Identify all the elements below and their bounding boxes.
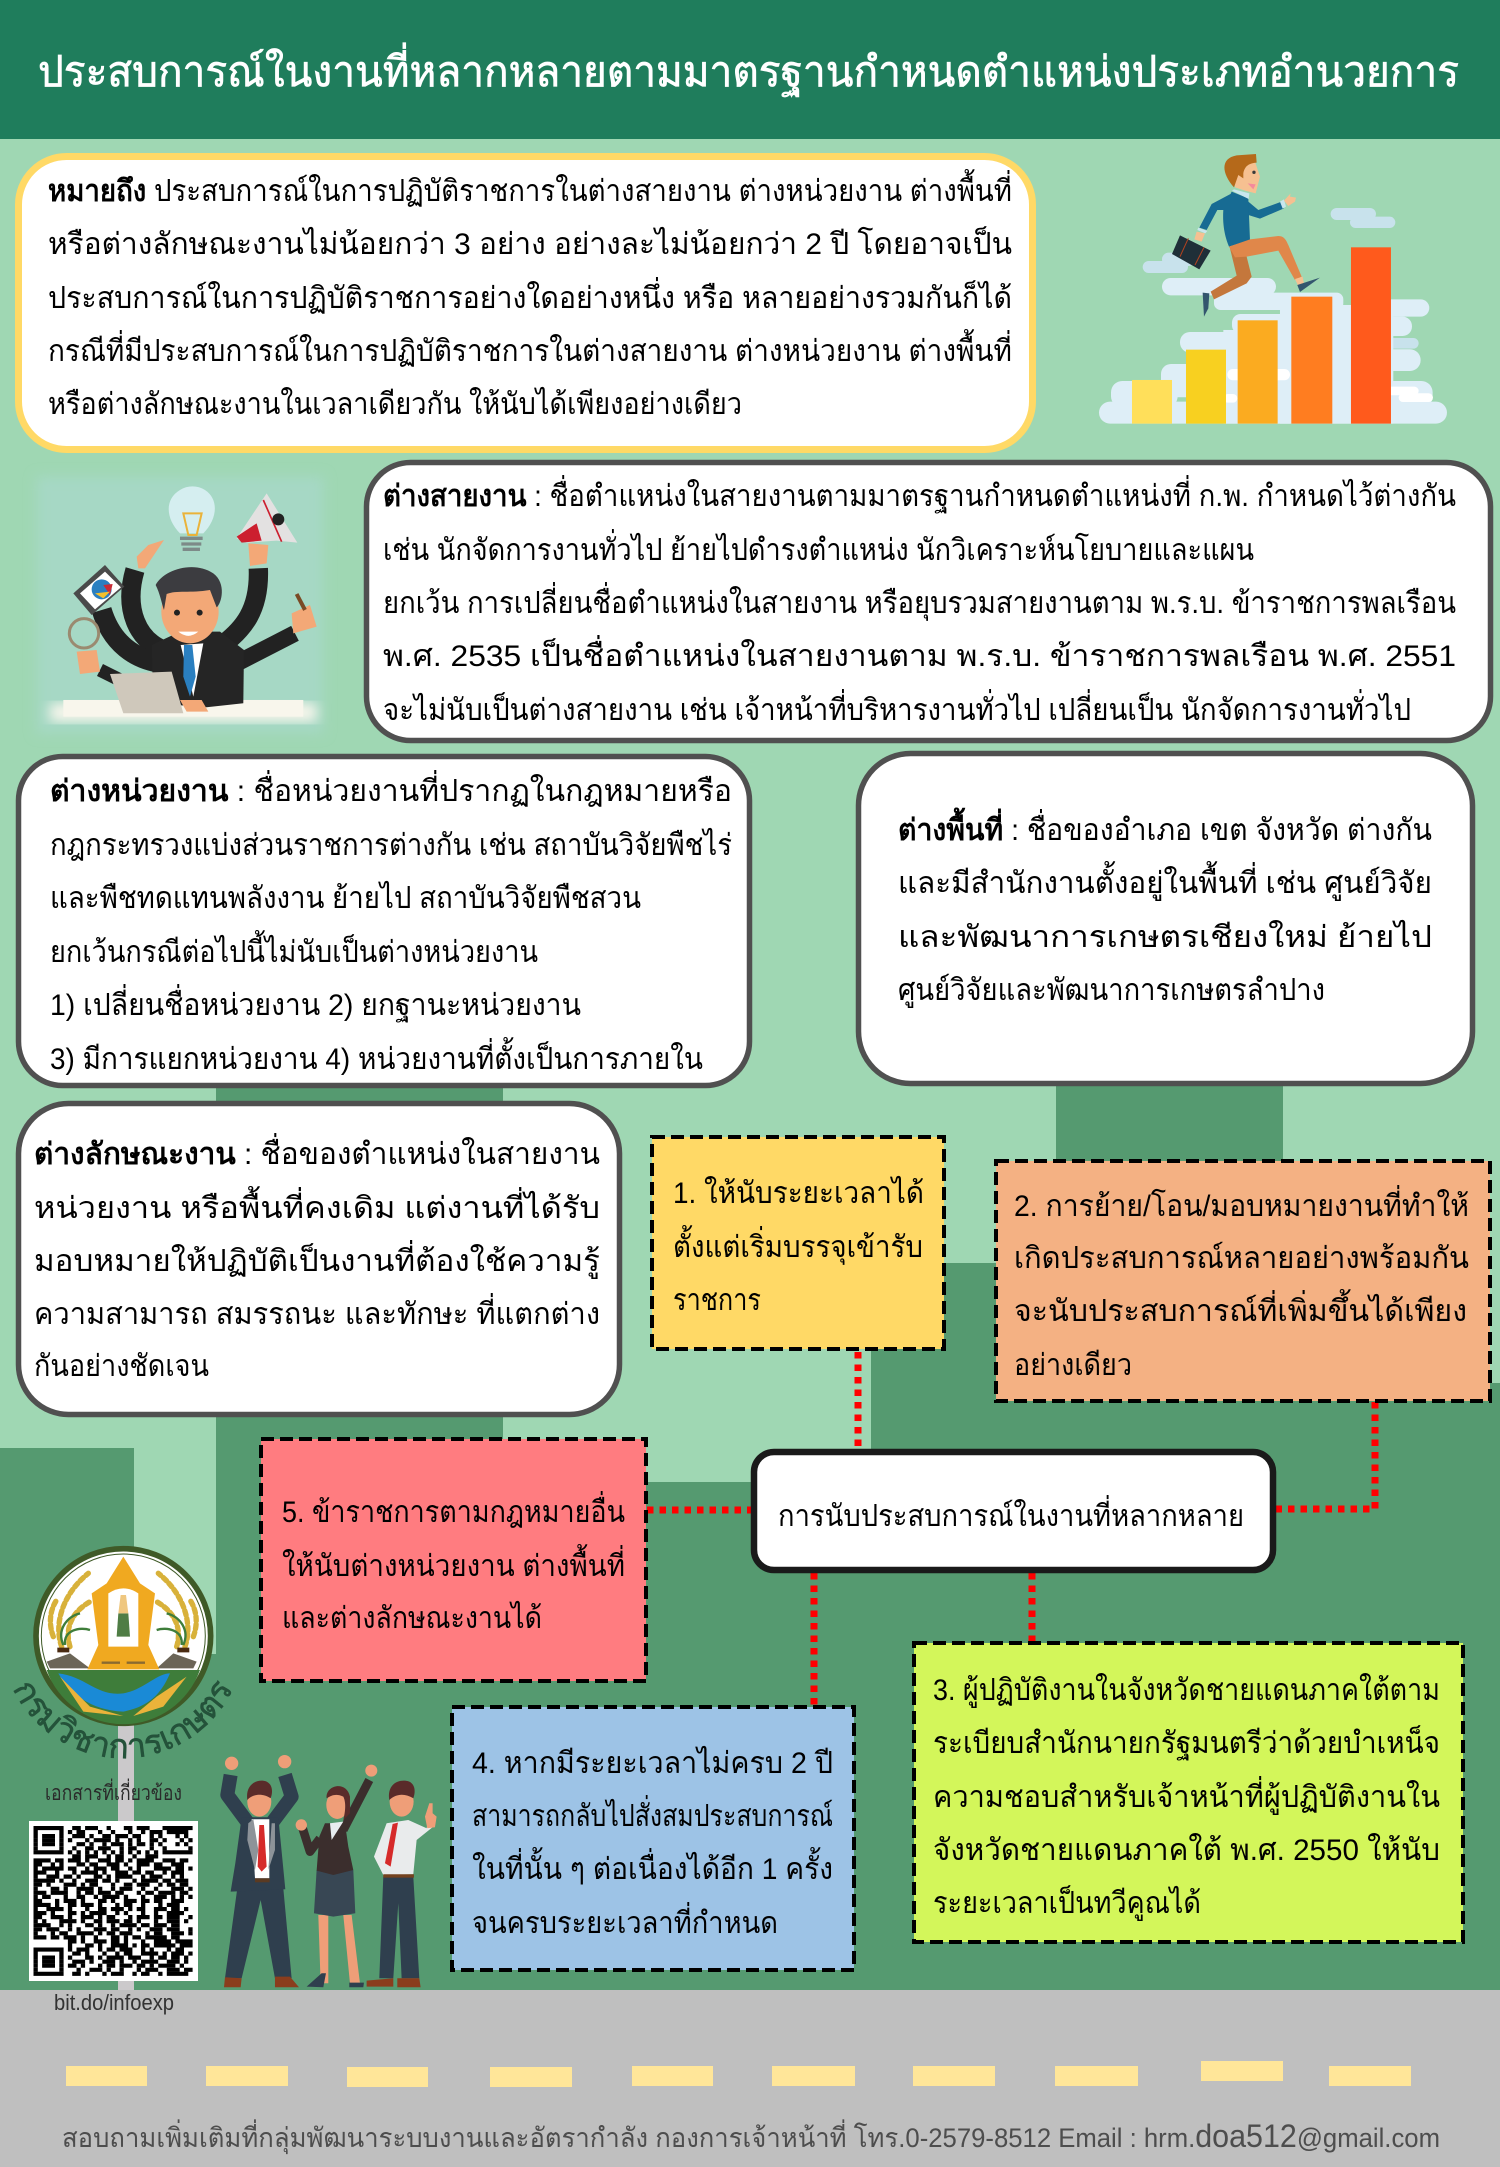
illustration: cheering team <box>224 1755 437 1987</box>
central box: counting varied experience: การนับประสบการณ์ในงานที่หลากหลาย <box>778 1495 1244 1533</box>
panel: different agency: 1) เปลี่ยนชื่อหน่วยงาน 2) ยกฐานะหน่วยงาน <box>50 984 581 1023</box>
central box: counting varied experience <box>754 1452 1273 1570</box>
panel: different area: ต่างพื้นที่ : ชื่อของอำเภอ เขต จังหวัด ต่างกัน <box>898 807 1432 847</box>
panel: different job character <box>18 1104 620 1414</box>
note 4: blue: 4. หากมีระยะเวลาไม่ครบ 2 ปี <box>472 1745 833 1780</box>
label: related documents: เอกสารที่เกี่ยวข้อง <box>45 1778 182 1805</box>
panel: different job character: มอบหมายให้ปฏิบัติเป็นงานที่ต้องใช้ความรู้ <box>34 1240 600 1279</box>
panel: different career line: เช่น นักจัดการงานทั่วไป ย้ายไปดำรงตำแหน่ง นักวิเคราะห์นโยบายและแผน <box>383 529 1254 567</box>
note 4: blue: สามารถกลับไปสั่งสมประสบการณ์ <box>472 1795 833 1833</box>
note 3: lime: ระเบียบสำนักนายกรัฐมนตรีว่าด้วยบำเหน็จ <box>933 1724 1440 1761</box>
note 1: yellow: ราชการ <box>673 1284 761 1317</box>
note 5: pink: 5. ข้าราชการตามกฎหมายอื่น <box>282 1491 625 1529</box>
man one <box>224 1755 299 1987</box>
note 2: orange: อย่างเดียว <box>1014 1349 1132 1382</box>
panel: different area: และพัฒนาการเกษตรเชียงใหม่ ย้ายไป <box>898 919 1432 954</box>
title banner: ประสบการณ์ในงานที่หลากหลายตามมาตรฐานกำหนดตำแหน่งประเภทอำนวยการ <box>38 43 1459 97</box>
note 2: orange: จะนับประสบการณ์ที่เพิ่มขึ้นได้เพียง <box>1014 1289 1467 1328</box>
note 1: yellow: ตั้งแต่เริ่มบรรจุเข้ารับ <box>673 1225 923 1266</box>
panel: different job character: ต่างลักษณะงาน : ชื่อของตำแหน่งในสายงาน <box>34 1133 600 1171</box>
panel: different job character: ความสามารถ สมรรถนะ และทักษะ ที่แตกต่าง <box>34 1293 600 1331</box>
logo wordmark: กรมวิชาการเกษตร <box>14 1680 232 1759</box>
road footer band <box>0 1990 1500 2167</box>
panel: different area: ศูนย์วิจัยและพัฒนาการเกษตรลำปาง <box>898 973 1325 1008</box>
panel: different career line: พ.ศ. 2535 เป็นชื่อตำแหน่งในสายงานตาม พ.ร.บ. ข้าราชการพลเรือน พ.ศ. 2551 <box>383 635 1456 673</box>
note 4: blue: จนครบระยะเวลาที่กำหนด <box>472 1902 778 1940</box>
title banner <box>0 0 1500 139</box>
panel: different agency: กฎกระทรวงแบ่งส่วนราชการต่างกัน เช่น สถาบันวิจัยพืชไร่ <box>50 827 732 862</box>
note 4: blue <box>452 1707 854 1970</box>
note 4: blue: ในที่นั้น ๆ ต่อเนื่องได้อีก 1 ครั้ง <box>472 1847 833 1886</box>
logo: Department of Agriculture seal <box>14 1546 232 1759</box>
panel: definition: กรณีที่มีประสบการณ์ในการปฏิบัติราชการในต่างสายงาน ต่างหน่วยงาน ต่างพื้นที่ <box>48 329 1012 368</box>
note 3: lime: 3. ผู้ปฏิบัติงานในจังหวัดชายแดนภาคใต้ตาม <box>933 1673 1440 1708</box>
note 1: yellow: 1. ให้นับระยะเวลาได้ <box>673 1175 924 1210</box>
panel: definition: หมายถึง ประสบการณ์ในการปฏิบัติราชการในต่างสายงาน ต่างหน่วยงาน ต่างพื้นที่ <box>48 169 1012 208</box>
note 1: yellow <box>652 1137 944 1349</box>
panel: different agency: 3) มีการแยกหน่วยงาน 4) หน่วยงานที่ตั้งเป็นการภายใน <box>50 1037 703 1076</box>
woman <box>296 1765 377 1987</box>
panel: definition: หรือต่างลักษณะงานไม่น้อยกว่า 3 อย่าง อย่างละไม่น้อยกว่า 2 ปี โดยอาจเป็น <box>48 225 1012 261</box>
note 3: lime <box>914 1643 1463 1942</box>
label: short URL: bit.do/infoexp <box>54 1990 174 2015</box>
note 2: orange: 2. การย้าย/โอน/มอบหมายงานที่ทำให้ <box>1014 1185 1469 1223</box>
note 2: orange: เกิดประสบการณ์หลายอย่างพร้อมกัน <box>1014 1241 1469 1275</box>
panel: different job character: หน่วยงาน หรือพื้นที่คงเดิม แต่งานที่ได้รับ <box>34 1186 600 1225</box>
icon: runner climbing bar chart <box>1099 154 1447 424</box>
panel: definition: ประสบการณ์ในการปฏิบัติราชการอย่างใดอย่างหนึ่ง หรือ หลายอย่างรวมกันก็ได้ <box>48 277 1012 315</box>
panel: different area <box>858 754 1472 1084</box>
panel: different area: และมีสำนักงานตั้งอยู่ในพื้นที่ เช่น ศูนย์วิจัย <box>898 861 1432 901</box>
panel: different career line: จะไม่นับเป็นต่างสายงาน เช่น เจ้าหน้าที่บริหารงานทั่วไป เปลี่ยนเป็น นักจัดการงานทั่วไป <box>383 689 1411 727</box>
panel: different agency: ต่างหน่วยงาน : ชื่อหน่วยงานที่ปรากฏในกฎหมายหรือ <box>50 770 732 808</box>
panel: different job character: กันอย่างชัดเจน <box>34 1350 209 1383</box>
panel: definition: หรือต่างลักษณะงานในเวลาเดียวกัน ให้นับได้เพียงอย่างเดียว <box>48 386 742 421</box>
illustration: multitasking manager <box>37 477 323 733</box>
note 5: pink: และต่างลักษณะงานได้ <box>282 1600 542 1635</box>
note 5: pink <box>261 1439 646 1681</box>
panel: different career line <box>366 462 1490 740</box>
connector: dotted red lines <box>647 1352 1375 1706</box>
note 3: lime: จังหวัดชายแดนภาคใต้ พ.ศ. 2550 ให้นับ <box>933 1833 1440 1867</box>
note 2: orange <box>996 1161 1490 1401</box>
man three <box>367 1781 437 1987</box>
note 3: lime: ความชอบสำหรับเจ้าหน้าที่ผู้ปฏิบัติงานใน <box>933 1776 1440 1815</box>
panel: definition <box>18 156 1032 450</box>
note 3: lime: ระยะเวลาเป็นทวีคูณได้ <box>933 1884 1201 1921</box>
QR code <box>29 1821 198 1981</box>
footer: contact line: สอบถามเพิ่มเติมที่กลุ่มพัฒนาระบบงานและอัตรากำลัง กองการเจ้าหน้าที่ โทร.0-2579-8512 Email : hrm.doa512@gmail.com <box>62 2118 1440 2155</box>
note 5: pink: ให้นับต่างหน่วยงาน ต่างพื้นที่ <box>282 1544 625 1583</box>
panel: different agency <box>18 756 750 1086</box>
panel: different agency: และพืชทดแทนพลังงาน ย้ายไป สถาบันวิจัยพืชสวน <box>50 880 641 915</box>
panel: different agency: ยกเว้นกรณีต่อไปนี้ไม่นับเป็นต่างหน่วยงาน <box>50 930 538 969</box>
